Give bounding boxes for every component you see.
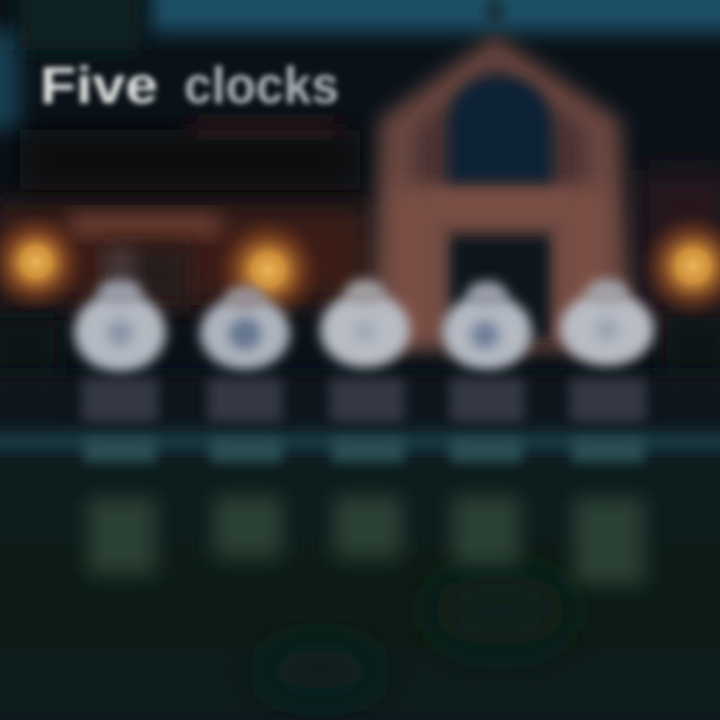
heading [450,438,522,462]
lamp centre [214,216,322,324]
stat block [330,378,404,422]
heading [84,438,156,462]
icon: white circle [74,248,166,372]
lamp left [0,212,86,312]
wall with warm light [0,205,720,420]
heading [572,438,644,462]
column 1 [74,248,166,574]
heading [210,438,282,462]
title underline glow [190,120,340,134]
lamp right [639,212,720,320]
title [40,57,339,115]
column 5 [560,279,654,584]
text block [334,496,402,558]
roof peak [486,0,504,24]
arched window [448,76,552,182]
title: clocks [184,57,339,115]
building facade [370,0,634,350]
column backgrounds [0,375,720,454]
stat block [82,378,158,422]
text block [214,496,282,558]
icon: white circle [200,286,290,370]
column 3 [320,279,410,558]
icon: white circle [442,281,532,370]
icon: white circle [320,279,410,368]
column 2 [200,286,290,558]
column 4 [442,281,532,564]
title: Five [40,57,158,115]
text block [574,498,644,584]
text block [88,498,156,574]
stat block [570,378,646,422]
text block [452,496,520,564]
stat block [450,378,524,422]
stat block [208,378,282,422]
window frame shade [415,60,585,185]
doorway [450,235,550,340]
heading [332,438,404,462]
ground [0,455,720,720]
icon: white circle [560,279,654,366]
